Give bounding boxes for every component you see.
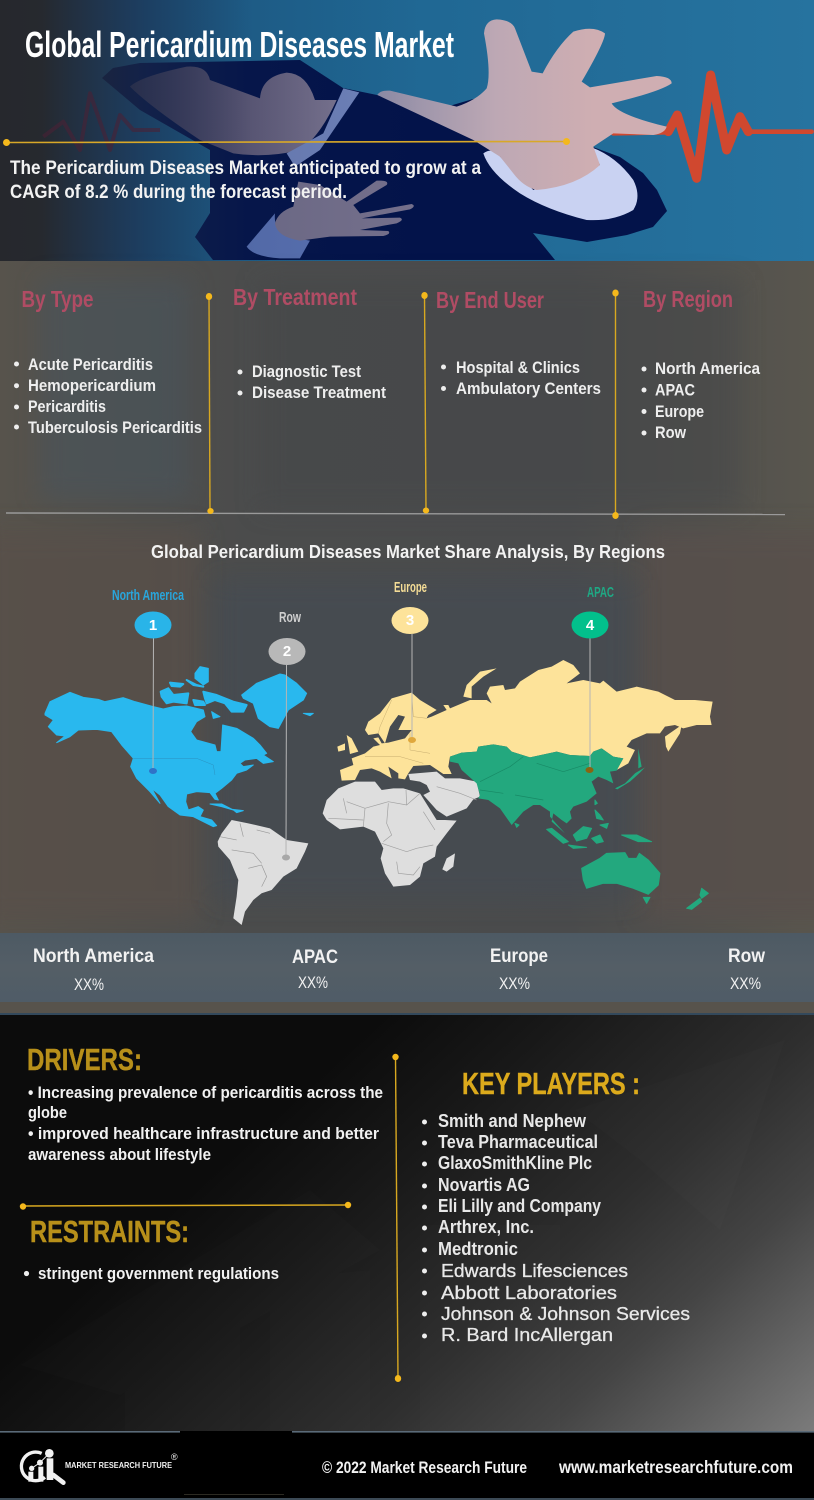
pin 1: North America: North America: [112, 587, 184, 604]
pin 4: APAC: APAC: [587, 584, 614, 601]
key players block: Medtronic: [438, 1239, 518, 1259]
map: South America: [218, 820, 308, 925]
logo wordmark: MARKET RESEARCH FUTURE: [65, 1461, 173, 1470]
CAGR statement: CAGR of 8.2 % during the forecast period.: [10, 182, 347, 203]
header divider with gold dots: [3, 138, 570, 146]
header banner: [0, 0, 814, 261]
illustration: faint left ECG trace: [43, 93, 160, 150]
key players block: Abbott Laboratories: [441, 1283, 617, 1303]
column: by type: [14, 286, 202, 437]
column: by treatment: Diagnostic Test: [252, 362, 361, 381]
pin 1: North America: 1: [149, 617, 157, 634]
column: by treatment: Disease Treatment: [252, 383, 386, 402]
map: Europe and Russia: [337, 660, 713, 781]
drivers block: [27, 1042, 383, 1164]
horizontal gold divider: [20, 1202, 351, 1210]
key players block: Smith and Nephew: [438, 1111, 587, 1131]
drivers block: globe: [28, 1103, 67, 1122]
column: by type: Acute Pericarditis: [28, 355, 153, 374]
key players block: R. Bard IncAllergan: [441, 1325, 613, 1345]
regional share table: Row: [728, 946, 765, 967]
column: by end user: Ambulatory Centers: [456, 379, 601, 398]
illustration: doctor body silhouette: [102, 60, 667, 260]
map pins: [112, 579, 614, 860]
title: Global Pericardium Diseases Market: [25, 24, 454, 65]
middle section background: [0, 261, 814, 1015]
pin 2: Row: [268, 609, 306, 860]
left fade overlay: [0, 0, 420, 261]
key players block: KEY PLAYERS :: [462, 1066, 640, 1101]
column: by region: Europe: [655, 402, 704, 421]
column: by region: Row: [655, 423, 687, 442]
illustration: raised hand: [377, 19, 672, 190]
column: by type: By Type: [22, 286, 94, 312]
key players block: Johnson & Johnson Services: [441, 1304, 690, 1324]
map heading: Global Pericardium Diseases Market Share Analysis, By Regions: [151, 541, 665, 562]
key players block: GlaxoSmithKline Plc: [438, 1153, 592, 1173]
drivers block: DRIVERS:: [27, 1042, 142, 1077]
footer: [0, 1431, 814, 1500]
regional share table: [0, 933, 814, 1002]
column: by end user: [436, 287, 601, 398]
CAGR statement: [10, 158, 481, 203]
map: Asia Pacific: [450, 744, 708, 909]
registered mark: ®: [171, 1452, 178, 1462]
key players block: Arthrex, Inc.: [438, 1217, 534, 1237]
column: by type: Tuberculosis Pericarditis: [28, 418, 202, 437]
pin 2: Row: 2: [283, 643, 291, 660]
pin 3: Europe: 3: [406, 612, 414, 629]
column: by region: APAC: [655, 380, 695, 400]
regional share table: XX%: [499, 974, 530, 993]
illustration: lower cuff: [247, 213, 310, 258]
column: by type: Hemopericardium: [28, 376, 156, 395]
drivers block: • Increasing prevalence of pericarditis across the: [28, 1083, 383, 1102]
copyright: © 2022 Market Research Future: [322, 1458, 527, 1477]
regional share table: Europe: [490, 946, 548, 967]
column: by type: Pericarditis: [28, 397, 106, 416]
illustration: lower hand: [275, 181, 414, 241]
pin 2: Row: Row: [279, 609, 301, 626]
map: Africa and Middle East: [323, 772, 480, 887]
vertical gold divider: [392, 1054, 401, 1382]
column: by treatment: [233, 284, 386, 402]
key players block: Eli Lilly and Company: [438, 1196, 601, 1216]
pin 4: APAC: 4: [586, 617, 595, 634]
restraints block: [24, 1214, 279, 1283]
drivers block: awareness about lifestyle: [28, 1145, 211, 1164]
map: North America: [45, 667, 313, 827]
restraints block: RESTRAINTS:: [30, 1214, 189, 1249]
icon: market research future logo: [21, 1449, 63, 1483]
pin 3: Europe: Europe: [394, 579, 427, 596]
illustration: white raised cuff: [483, 147, 637, 220]
illustration: red ECG trace: [613, 75, 812, 178]
drivers block: • improved healthcare infrastructure and better: [28, 1124, 379, 1143]
key players block: Teva Pharmaceutical: [438, 1132, 598, 1152]
key players block: Novartis AG: [438, 1175, 530, 1195]
column: by region: [642, 286, 760, 442]
regional share table: North America: [33, 946, 154, 967]
restraints block: stringent government regulations: [38, 1264, 279, 1283]
illustration: upper arm hand: [130, 66, 337, 155]
regional share table: XX%: [730, 974, 761, 993]
regional share table: APAC: [292, 947, 338, 968]
column: by end user: By End User: [436, 287, 544, 313]
key players block: [422, 1066, 690, 1345]
column: by region: By Region: [643, 286, 733, 312]
pin 1: North America: [112, 587, 184, 774]
illustration: shirt collar: [287, 88, 359, 167]
pin 4: APAC: [572, 584, 614, 773]
regional share table: XX%: [74, 975, 104, 994]
regional share table: XX%: [298, 973, 328, 992]
key players block: Edwards Lifesciences: [441, 1261, 628, 1281]
pin 3: Europe: [392, 579, 428, 743]
CAGR statement: The Pericardium Diseases Market anticipated to grow at a: [10, 158, 481, 179]
column dividers: [6, 290, 785, 519]
segmentation panel: [6, 284, 785, 519]
column: by end user: Hospital & Clinics: [456, 358, 580, 377]
column: by treatment: By Treatment: [233, 284, 357, 310]
lower panel background: [0, 1013, 814, 1432]
world map: [45, 660, 713, 925]
column: by region: North America: [655, 359, 760, 378]
